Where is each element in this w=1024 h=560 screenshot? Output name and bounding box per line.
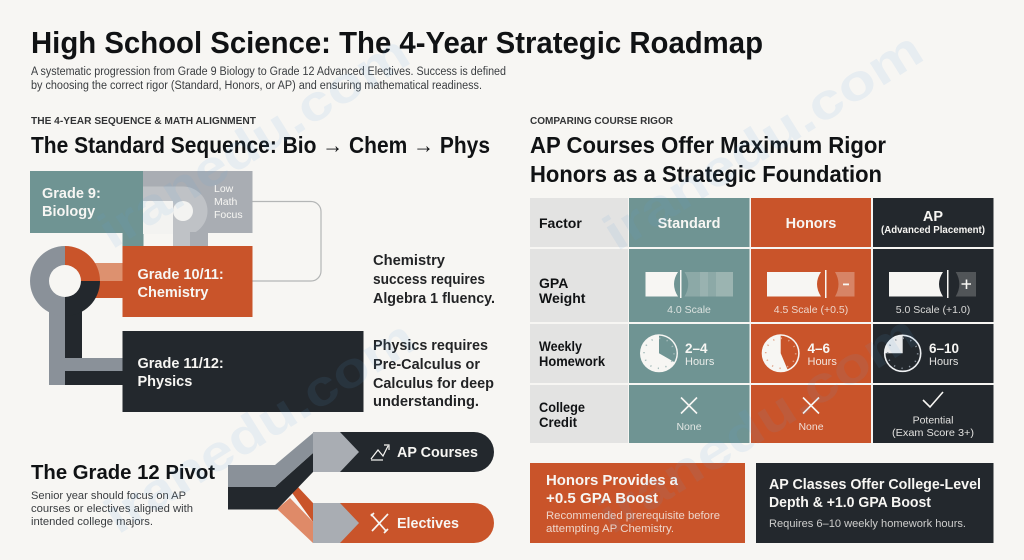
ap column: 6–10 <box>929 341 959 356</box>
note: chemistry math requirement: Chemistry <box>373 253 445 269</box>
right section heading: AP Courses Offer Maximum Rigor <box>530 132 886 158</box>
note: chemistry math requirement: success requires <box>373 272 485 288</box>
icon: clock 6-10 hours <box>885 335 921 371</box>
factor column: Weight <box>539 290 586 306</box>
ap column: 5.0 Scale (+1.0) <box>896 304 970 316</box>
honors column <box>751 198 871 443</box>
icon: gpa bar ap <box>889 270 976 298</box>
watermark overlay <box>88 20 932 544</box>
ap column <box>873 198 994 443</box>
elective branch <box>290 487 313 522</box>
icon: clock 4-6 hours <box>762 334 800 372</box>
callout: ap boost: Depth & +1.0 GPA Boost <box>769 494 931 511</box>
subtitle: A systematic progression from Grade 9 Biology to Grade 12 Advanced Electives. Success is defined <box>31 66 506 78</box>
honors column: None <box>798 421 824 433</box>
right section eyebrow: COMPARING COURSE RIGOR <box>530 115 673 127</box>
watermark overlay: iranedu.com <box>94 309 425 544</box>
icon: trend arrows <box>371 445 389 460</box>
factor column: Credit <box>539 414 577 430</box>
note: physics math requirement: Pre-Calculus or <box>373 357 480 373</box>
grade 12 pivot text <box>31 490 193 528</box>
grade 12 pivot text: Senior year should focus on AP <box>31 490 186 502</box>
connector: teal biology to chemistry <box>122 233 144 247</box>
standard column: None <box>676 421 702 433</box>
standard column: 4.0 Scale <box>667 304 711 316</box>
factor column: Homework <box>539 353 605 369</box>
standard column: Standard <box>658 216 720 232</box>
box: grade 10/11 chemistry: Grade 10/11: <box>138 267 224 283</box>
grade 12 pivot text: intended college majors. <box>31 516 153 528</box>
factor column: Factor <box>539 215 582 231</box>
box: low math focus: Focus <box>214 209 243 221</box>
watermark overlay: iranedu.com <box>88 24 419 259</box>
title: High School Science: The 4-Year Strategic Roadmap <box>31 26 763 60</box>
box: grade 9 biology: Grade 9: <box>42 186 101 202</box>
honors column: Honors <box>786 216 836 232</box>
watermark overlay: iranedu.com <box>593 20 932 261</box>
box: low math focus: Low <box>214 183 234 195</box>
connector: chemistry to circle <box>90 263 123 298</box>
icon: crossed pencils <box>371 513 388 533</box>
left section eyebrow: THE 4-YEAR SEQUENCE & MATH ALIGNMENT <box>31 115 257 127</box>
box: low math focus: Math <box>214 196 238 208</box>
callout: honors boost <box>530 463 745 543</box>
pill: ap courses: AP Courses <box>397 445 478 461</box>
box: grade 9 biology: Biology <box>42 204 95 220</box>
box: grade 9 biology <box>30 171 143 233</box>
ap column: Hours <box>929 356 959 368</box>
sequence diagram <box>30 171 364 412</box>
standard column: 2–4 <box>685 341 708 356</box>
icon: cross <box>803 398 819 414</box>
factor column: College <box>539 399 585 415</box>
callout: honors boost: Honors Provides a <box>546 472 679 489</box>
gray stem <box>228 433 313 487</box>
box: grade 11/12 physics <box>122 331 364 412</box>
icon: gpa bar standard <box>646 270 733 298</box>
junction ring <box>30 246 100 316</box>
subtitle <box>31 66 506 92</box>
connector: return loop line <box>252 202 321 281</box>
pill: ap courses <box>313 432 494 472</box>
box: grade 11/12 physics: Physics <box>138 374 192 390</box>
ap column: Potential <box>913 414 953 426</box>
note: physics math requirement: understanding. <box>373 394 479 410</box>
standard column <box>629 198 750 443</box>
icon: check <box>923 392 943 407</box>
callout: honors boost: +0.5 GPA Boost <box>546 490 658 507</box>
factor column <box>530 198 628 443</box>
watermark overlay: iranedu.com <box>588 303 927 544</box>
honors column: Hours <box>808 356 837 368</box>
note: physics math requirement: Calculus for deep <box>373 376 494 392</box>
icon: gpa bar honors <box>767 270 854 298</box>
grade 12 pivot heading: The Grade 12 Pivot <box>31 461 215 484</box>
note: physics math requirement <box>373 338 494 410</box>
callout: honors boost: attempting AP Chemistry. <box>546 523 674 535</box>
callout: honors boost: Recommended prerequisite before <box>546 510 720 522</box>
factor column: GPA <box>539 275 568 291</box>
grade 12 pivot text: courses or electives aligned with <box>31 503 193 515</box>
left section heading: The Standard Sequence: Bio → Chem → Phys <box>31 132 490 158</box>
callout: ap boost <box>756 463 994 543</box>
box: grade 10/11 chemistry: Chemistry <box>138 285 208 301</box>
box: grade 11/12 physics: Grade 11/12: <box>138 356 224 372</box>
box: grade 10/11 chemistry <box>122 246 252 317</box>
subtitle: by choosing the correct rigor (Standard, Honors, or AP) and ensuring mathematical readiness. <box>31 80 482 92</box>
right section heading <box>530 132 886 187</box>
dark stem <box>228 453 313 510</box>
junction pipes to physics <box>49 281 123 385</box>
factor column: Weekly <box>539 338 582 354</box>
standard column: Hours <box>685 356 715 368</box>
box: low math focus <box>143 171 252 247</box>
ap column: (Exam Score 3+) <box>892 427 974 439</box>
note: chemistry math requirement: Algebra 1 fluency. <box>373 291 495 307</box>
icon: clock 2-4 hours <box>640 334 678 372</box>
note: chemistry math requirement <box>373 253 495 307</box>
pill: electives: Electives <box>397 516 459 532</box>
icon: cross <box>681 398 697 414</box>
callout: ap boost: Requires 6–10 weekly homework hours. <box>769 518 966 530</box>
ap column: (Advanced Placement) <box>881 225 985 236</box>
pill: electives <box>313 503 494 543</box>
honors column: 4.5 Scale (+0.5) <box>774 304 848 316</box>
honors column: 4–6 <box>808 341 831 356</box>
note: physics math requirement: Physics requires <box>373 338 488 354</box>
ap column: AP <box>923 209 943 225</box>
right section heading: Honors as a Strategic Foundation <box>530 161 882 187</box>
comparison table <box>530 198 994 443</box>
callout: ap boost: AP Classes Offer College-Level <box>769 476 981 493</box>
pivot fork diagram <box>228 432 494 543</box>
